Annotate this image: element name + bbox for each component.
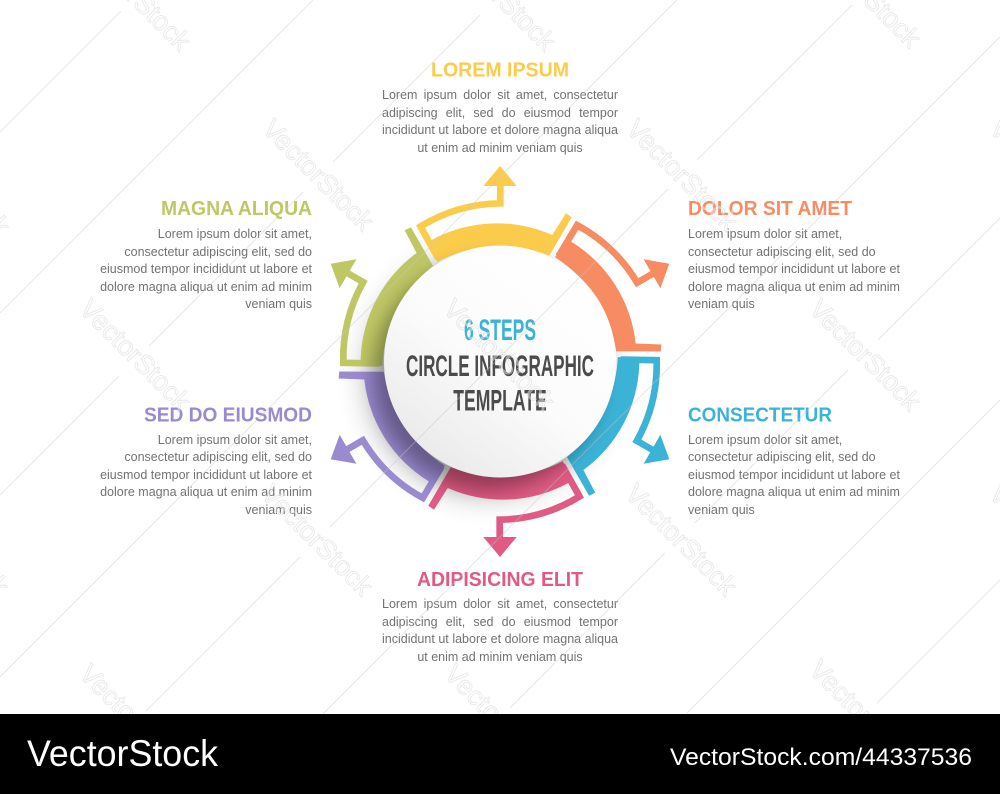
text block: eiusmod tempor incididunt ut labore et: [688, 262, 900, 276]
watermark overlay: VectorStock: [803, 654, 927, 778]
text block: [100, 433, 312, 517]
watermark overlay: VectorStock: [437, 293, 561, 417]
segment: orange arrow: [547, 195, 705, 374]
watermark overlay: VectorStock: [438, 658, 562, 782]
heading: ADIPISICING ELIT: [417, 568, 583, 591]
text block: [382, 88, 618, 154]
footer url: VectorStock.com/44337536: [670, 744, 972, 771]
ring shadow: [354, 240, 622, 508]
text block: Lorem ipsum dolor sit amet, consectetur: [382, 88, 618, 102]
text block: Lorem ipsum dolor sit amet,: [688, 227, 842, 241]
text block: consectetur adipiscing elit, sed do: [688, 245, 876, 259]
heading: DOLOR SIT AMET: [688, 197, 852, 220]
text block: adipiscing elit, sed do eiusmod tempor: [382, 106, 618, 120]
segment: pink arrow: [428, 461, 580, 557]
text block: incididunt ut labore et dolore magna aliqua: [382, 632, 618, 646]
text block: dolore magna aliqua ut enim ad minim: [100, 485, 312, 499]
segment: purple arrow: [295, 349, 453, 528]
text block: incididunt ut labore et dolore magna aliqua: [382, 123, 618, 137]
text block: [382, 597, 618, 664]
text block: Lorem ipsum dolor sit amet, consectetur: [382, 597, 618, 611]
segment: green arrow: [291, 202, 449, 380]
heading: LOREM IPSUM: [431, 58, 569, 81]
heading: CONSECTETUR: [688, 403, 832, 426]
step: lorem ipsum: [382, 58, 618, 154]
text block: eiusmod tempor incididunt ut labore et: [100, 262, 312, 276]
heading: SED DO EIUSMOD: [144, 403, 312, 426]
footer logo: VectorStock: [27, 733, 218, 774]
watermark overlay: VectorStock: [255, 478, 379, 602]
step: dolor sit amet: [688, 197, 900, 311]
text block: ut enim ad minim veniam quis: [417, 650, 583, 664]
text block: consectetur adipiscing elit, sed do: [688, 450, 876, 464]
text block: [688, 227, 900, 311]
text block: veniam quis: [245, 297, 312, 311]
center disc: [384, 246, 616, 478]
watermark overlay: VectorStock: [803, 293, 927, 417]
text block: dolore magna aliqua ut enim ad minim: [688, 485, 900, 499]
watermark overlay: VectorStock: [620, 113, 744, 237]
text block: consectetur adipiscing elit, sed do: [124, 245, 312, 259]
watermark overlay: VectorStock: [619, 478, 743, 602]
text block: Lorem ipsum dolor sit amet,: [688, 433, 842, 447]
heading: MAGNA ALIQUA: [161, 197, 312, 220]
text block: consectetur adipiscing elit, sed do: [124, 450, 312, 464]
step: sed do eiusmod: [100, 403, 312, 517]
segment: blue arrow: [551, 343, 709, 521]
center title: CIRCLE INFOGRAPHIC: [406, 350, 594, 383]
segment: yellow arrow: [420, 166, 572, 262]
step: consectetur: [688, 403, 900, 517]
text block: ut enim ad minim veniam quis: [417, 140, 583, 154]
watermark overlay: VectorStock: [256, 113, 380, 237]
step: magna aliqua: [100, 197, 312, 311]
watermark overlay: VectorStock: [73, 658, 197, 782]
text block: eiusmod tempor incididunt ut labore et: [688, 468, 900, 482]
text block: veniam quis: [688, 297, 755, 311]
text block: dolore magna aliqua ut enim ad minim: [100, 280, 312, 294]
text block: Lorem ipsum dolor sit amet,: [158, 227, 312, 241]
text block: dolore magna aliqua ut enim ad minim: [688, 280, 900, 294]
center title: 6 STEPS: [464, 314, 536, 347]
text block: [688, 433, 900, 517]
footer bar: [0, 714, 1000, 794]
text block: veniam quis: [245, 503, 312, 517]
center title: [406, 314, 594, 418]
text block: [100, 227, 312, 311]
text block: adipiscing elit, sed do eiusmod tempor: [382, 615, 618, 629]
watermark overlay: VectorStock: [73, 293, 197, 417]
center disc shadow: [373, 260, 603, 490]
text block: eiusmod tempor incididunt ut labore et: [100, 468, 312, 482]
text block: Lorem ipsum dolor sit amet,: [158, 433, 312, 447]
center title: TEMPLATE: [453, 385, 547, 418]
step: adipisicing elit: [382, 568, 618, 664]
text block: veniam quis: [688, 503, 755, 517]
